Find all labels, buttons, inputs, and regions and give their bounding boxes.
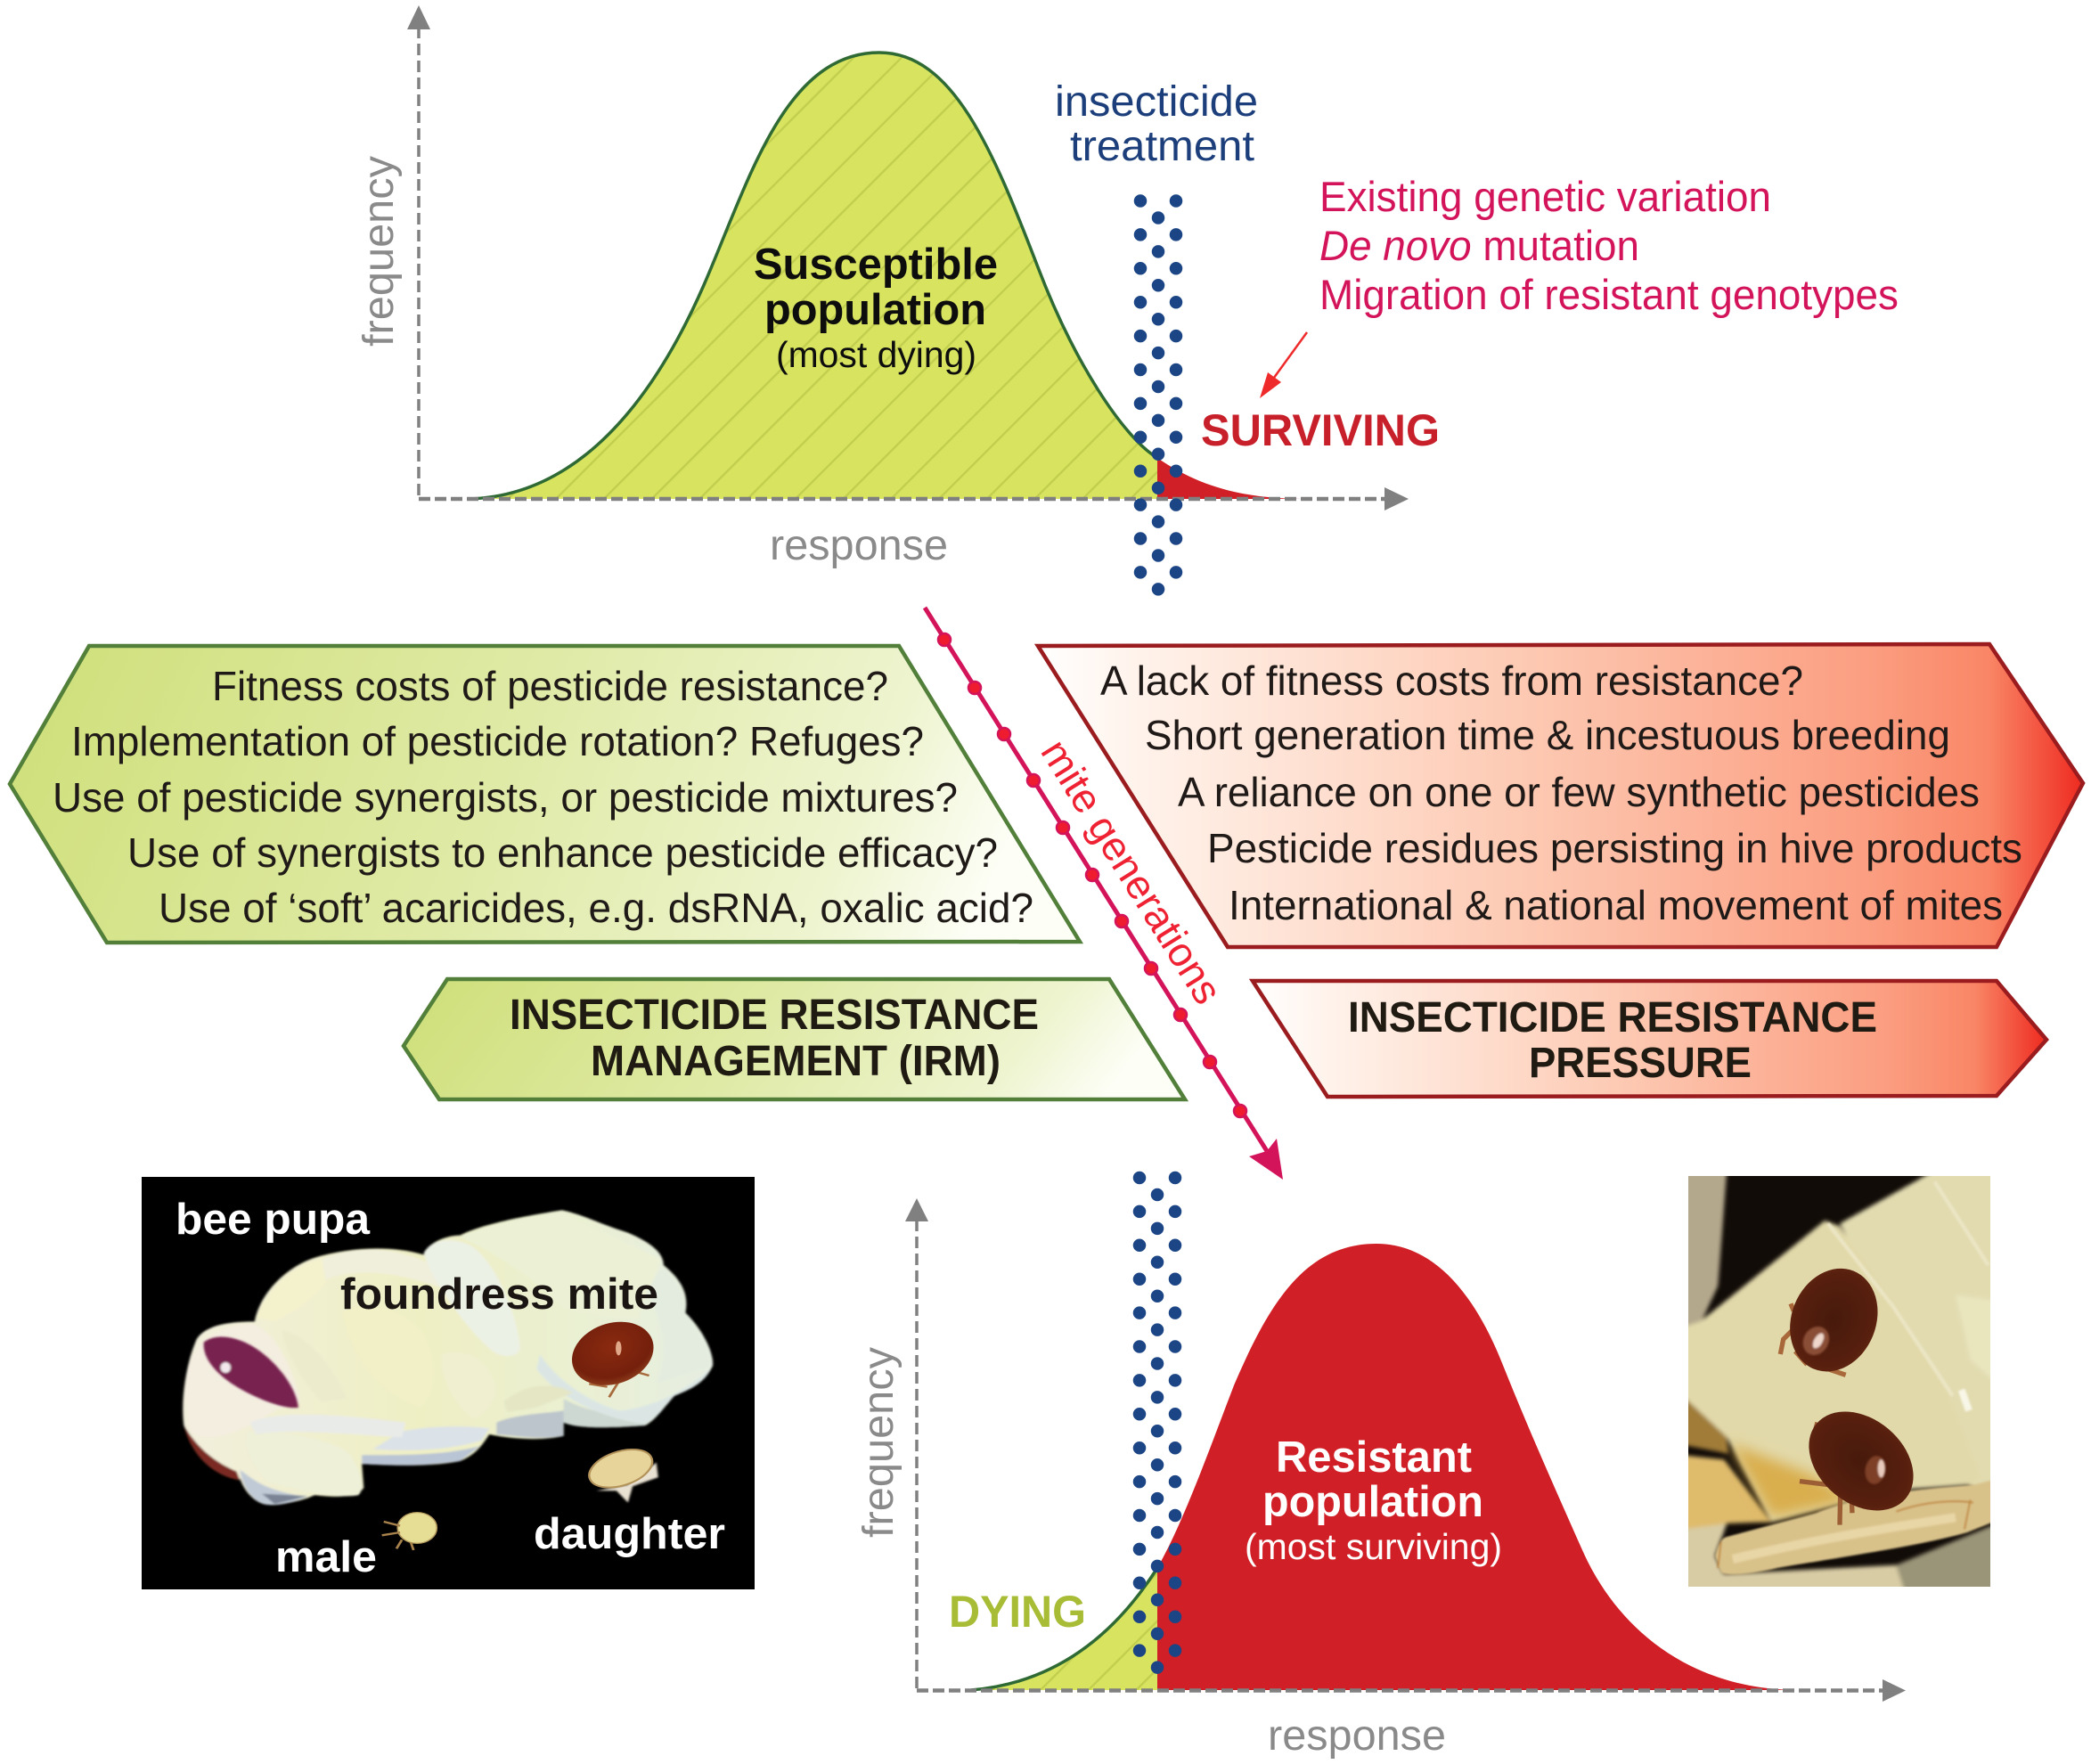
panel: resistance pressure factors [1038,644,2083,947]
text: IRM questions: Use of ‘soft’ acaricides, e.g. dsRNA, oxalic acid? [159,885,1033,931]
text: sources of variation: De novo mutation [1319,222,1639,269]
curve outline: dying [971,1568,1157,1690]
arrow: to surviving [1260,332,1307,398]
label: susceptible population: (most dying) [776,334,976,375]
photo: bee pupa with mites [142,1177,755,1589]
text: pressure factors: Short generation time & incestuous breeding [1145,712,1950,758]
top chart: susceptible population [355,5,1899,590]
y axis [905,1198,928,1690]
foundress mite [572,1322,654,1398]
curve: dying area [971,1568,1157,1690]
label: susceptible population: population [764,286,986,334]
label: resistant population: Resistant [1276,1433,1472,1482]
text: pressure factors [1100,657,2022,928]
text: IRM questions: Fitness costs of pesticide resistance? [212,663,888,709]
label: bee pupa: bee pupa [176,1196,371,1244]
label: resistant population: population [1262,1478,1483,1526]
banner text [1348,994,1877,1087]
label: male: male [275,1533,377,1581]
banner: insecticide resistance management [404,979,1185,1099]
insecticide dots [1140,201,1176,590]
x axis [419,487,1409,510]
text: IRM questions [53,663,1033,931]
label: frequency: frequency [355,156,403,347]
yellow glow [1730,1443,1855,1517]
text: sources of variation [1319,173,1899,318]
label: response: response [1268,1712,1446,1760]
label: insecticide treatment: treatment [1070,123,1254,170]
curve outline [468,53,1157,499]
label: surviving: SURVIVING [1201,405,1440,455]
banner text: INSECTICIDE RESISTANCE [510,992,1039,1039]
text: IRM questions: Implementation of pesticide rotation? Refuges? [71,718,924,764]
mite upper [1778,1269,1878,1377]
label: daughter: daughter [534,1510,725,1558]
photo shading [1682,1170,1997,1592]
banner text: INSECTICIDE RESISTANCE [1348,994,1877,1041]
daughter mite [588,1449,659,1504]
label: susceptible population [754,241,998,375]
segment highlights [1828,1182,1989,1410]
text: sources of variation: Existing genetic variation [1319,173,1771,220]
label: resistant population: (most surviving) [1245,1526,1502,1567]
text: pressure factors: Pesticide residues persisting in hive products [1207,825,2022,871]
text: IRM questions: Use of pesticide synergists, or pesticide mixtures? [53,774,958,821]
label: resistant population [1245,1433,1502,1567]
male mite [382,1513,437,1550]
insecticide dots [1139,1178,1175,1669]
label: dying: DYING [949,1587,1086,1637]
label: mite generations: mite generations [1033,731,1231,1012]
banner text [510,992,1039,1085]
curve: resistant area [1157,1244,1795,1690]
text: pressure factors: A lack of fitness costs from resistance? [1100,657,1803,704]
text: pressure factors: A reliance on one or few synthetic pesticides [1178,769,1980,815]
banner text: PRESSURE [1529,1040,1752,1087]
photo: mites on pupa close-up [1682,1170,1997,1592]
label: insecticide treatment [1055,78,1258,170]
mite leg segment [1715,1479,1997,1574]
text: sources of variation: Migration of resistant genotypes [1319,271,1899,318]
banner text: MANAGEMENT (IRM) [591,1038,1001,1085]
mite lower [1800,1411,1914,1525]
x axis [917,1679,1906,1702]
text: pressure factors: International & national movement of mites [1229,882,2003,928]
bottom chart: resistant population [855,1178,1906,1760]
pupa body [183,1210,713,1550]
text: IRM questions: Use of synergists to enhance pesticide efficacy? [127,829,998,876]
label: frequency: frequency [855,1347,903,1538]
label: response: response [770,522,948,569]
pupa eye [204,1336,298,1408]
arrow: mite generations [925,608,1283,1180]
banner: insecticide resistance pressure [1253,981,2046,1097]
label: insecticide treatment: insecticide [1055,78,1258,126]
curve: susceptible area [468,53,1157,499]
panel: IRM questions [10,646,1080,943]
label: susceptible population: Susceptible [754,241,998,289]
label: foundress mite: foundress mite [340,1270,658,1319]
curve: surviving tail [1157,458,1301,499]
generation dots [938,633,1246,1117]
y axis [407,5,430,499]
